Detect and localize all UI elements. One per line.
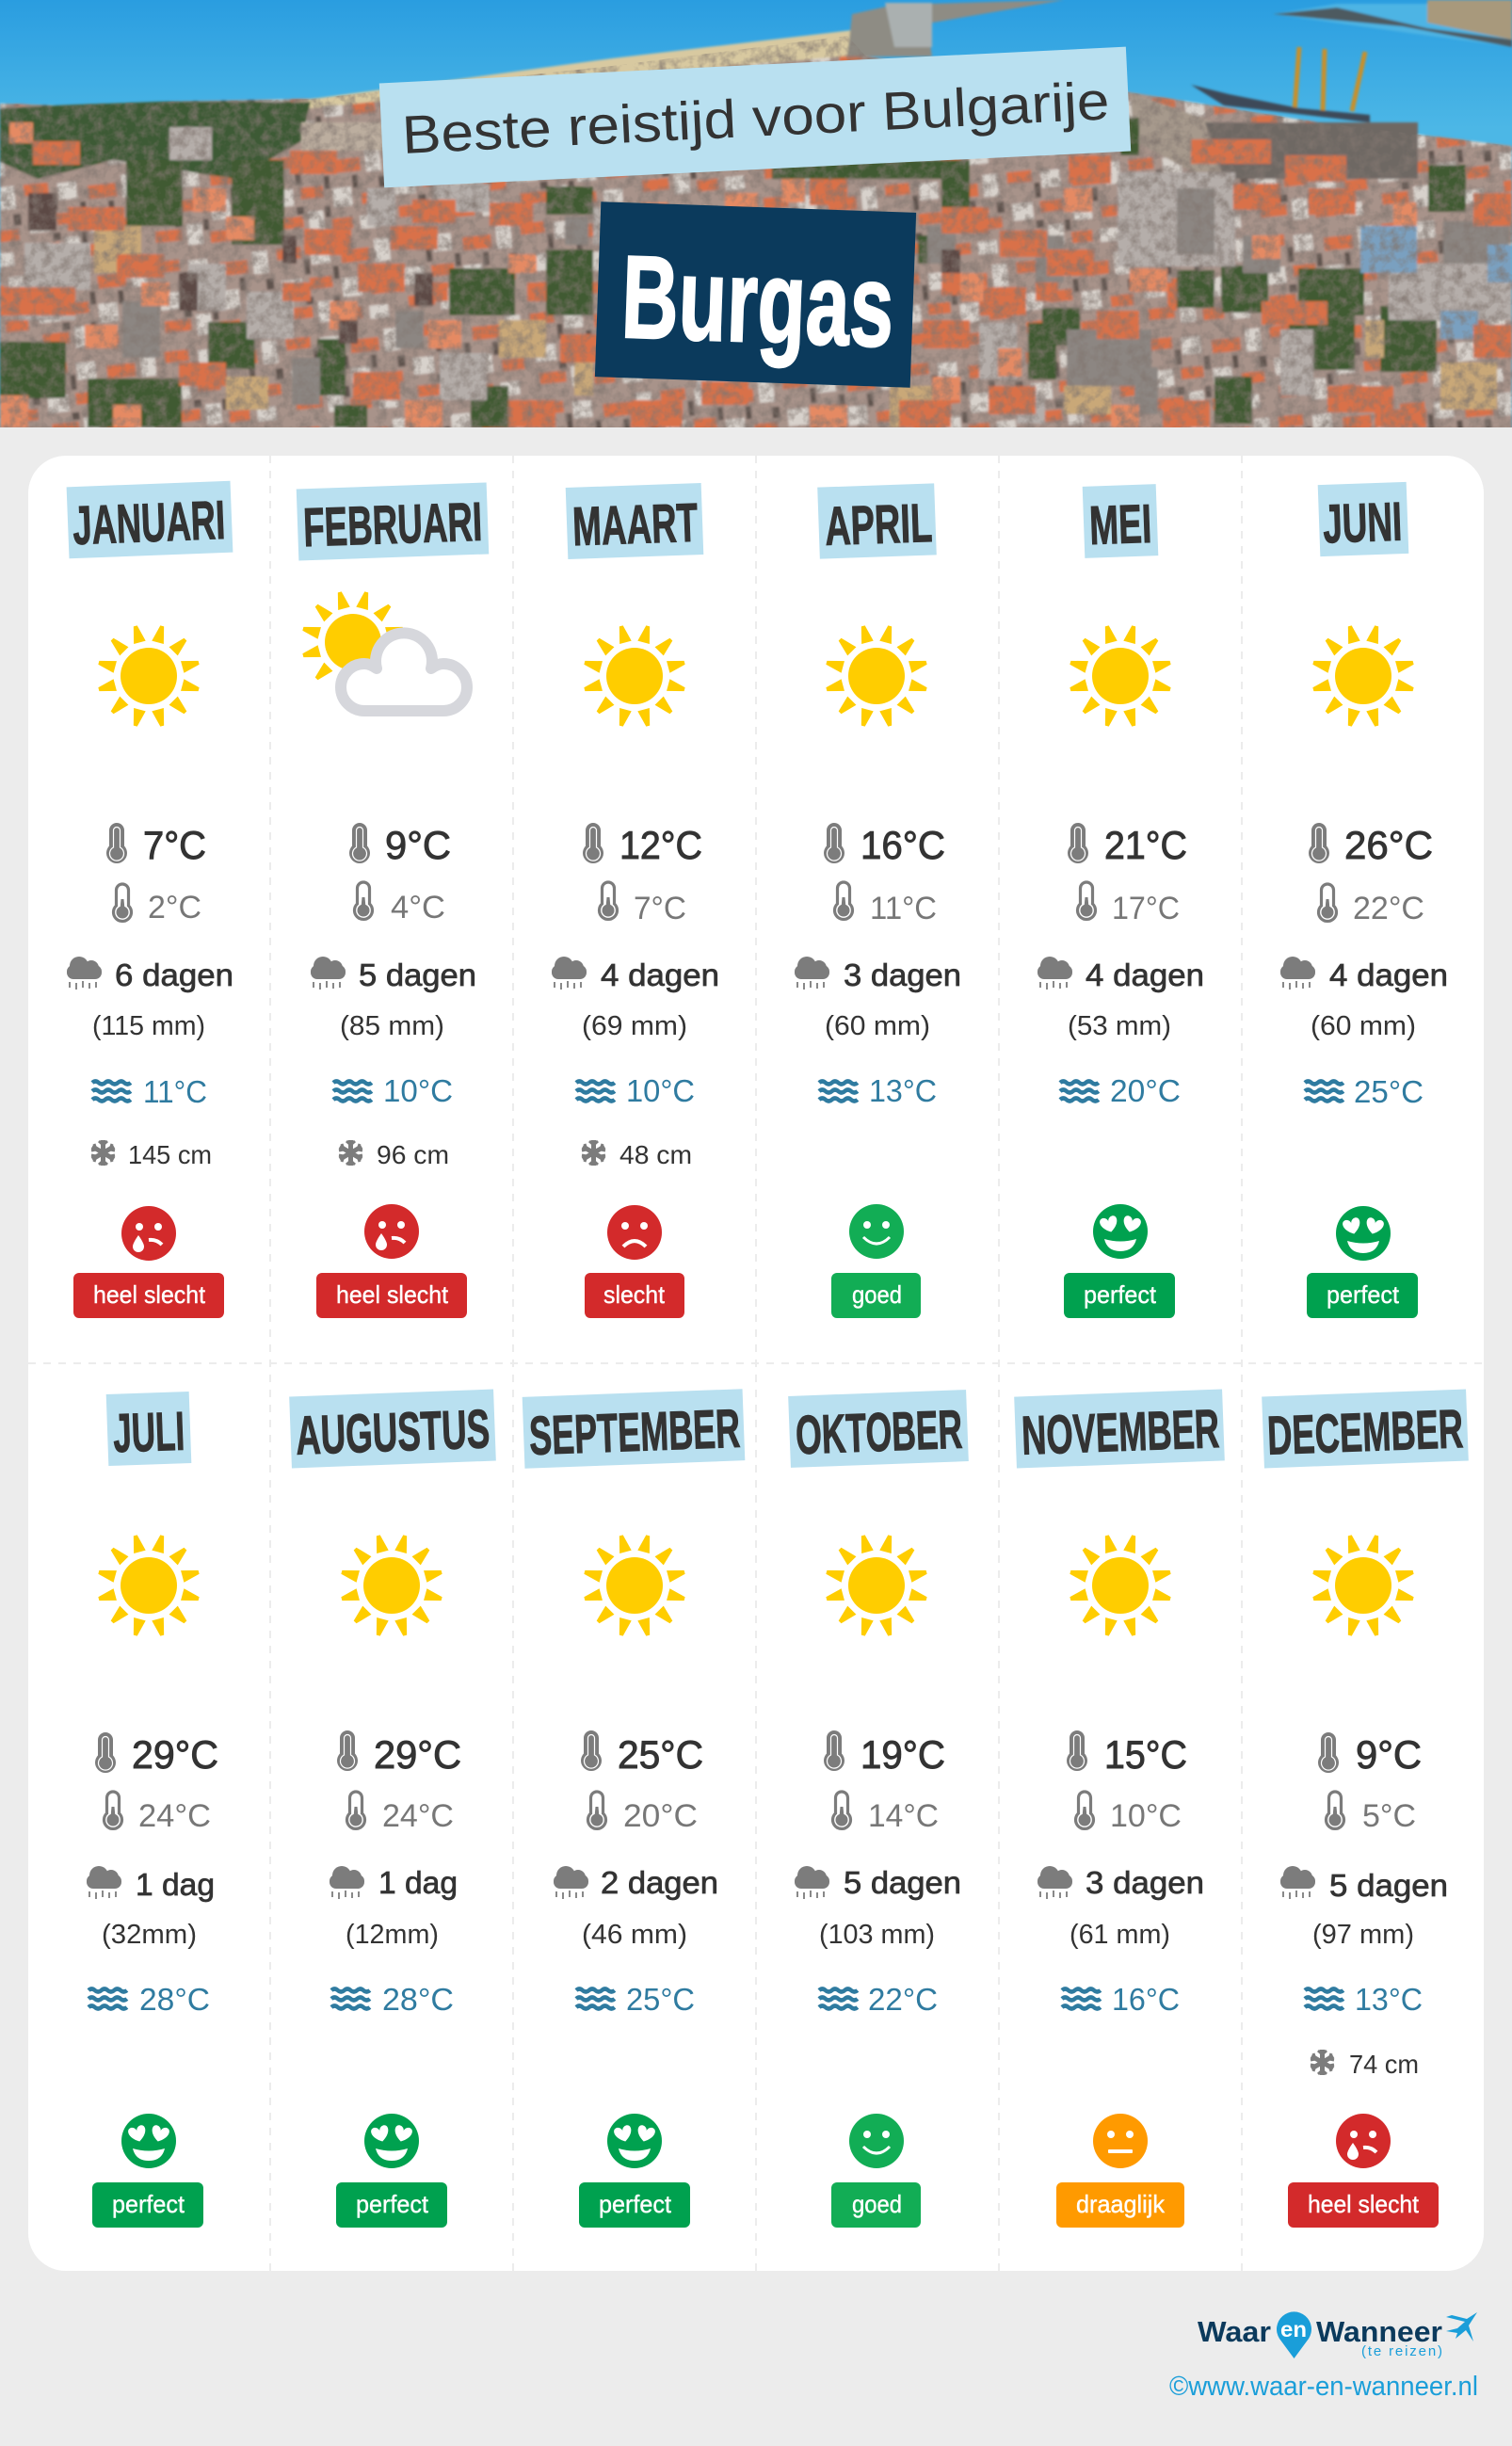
max temperature: 7°C — [143, 823, 206, 867]
rating badge — [831, 1273, 921, 1318]
rating smiley — [1336, 1206, 1391, 1261]
sea temperature: 25°C — [1354, 1074, 1424, 1109]
rain days: 6 dagen — [115, 957, 233, 992]
sea temperature: 25°C — [626, 1982, 695, 2017]
sea temperature: 22°C — [868, 1982, 938, 2017]
min temperature — [599, 882, 686, 926]
sea temperature — [331, 1982, 454, 2017]
rain days — [1037, 1865, 1204, 1900]
min temperature — [104, 1792, 211, 1834]
rating smiley — [1336, 2114, 1391, 2168]
max temperature — [581, 1730, 703, 1777]
month label: JANUARI — [72, 490, 226, 556]
rating badge — [585, 1273, 684, 1318]
panel: januari — [67, 481, 233, 1318]
copyright url: ©www.waar-en-wanneer.nl — [1169, 2372, 1478, 2402]
rating smiley — [1093, 2114, 1148, 2168]
rating badge: goed — [852, 2190, 902, 2218]
sea temperature: 16°C — [1112, 1982, 1180, 2017]
month label — [1014, 1389, 1225, 1469]
rain days — [67, 957, 233, 992]
max temperature — [349, 823, 451, 867]
snowfall: 48 cm — [619, 1140, 692, 1169]
rating badge: heel slecht — [1308, 2190, 1420, 2218]
min temperature: 11°C — [870, 891, 937, 926]
max temperature — [95, 1732, 218, 1777]
snowfall: 145 cm — [128, 1140, 212, 1169]
sea temperature — [88, 1982, 210, 2017]
max temperature — [337, 1730, 461, 1777]
max temperature — [1068, 823, 1187, 867]
rainfall: (61 mm) — [1070, 1920, 1170, 1950]
icon: sun — [1311, 624, 1415, 728]
rain days: 4 dagen — [1086, 957, 1204, 992]
logo: Waar en Wanneer: en — [1280, 2317, 1307, 2341]
min temperature: 2°C — [148, 890, 201, 925]
snowfall: 96 cm — [377, 1140, 449, 1169]
max temperature — [1318, 1732, 1422, 1777]
month label — [1318, 482, 1408, 556]
snowfall: 74 cm — [1349, 2050, 1419, 2079]
rain days — [1280, 957, 1448, 992]
rain days — [311, 957, 476, 992]
rating smiley — [1093, 1204, 1148, 1259]
sea temperature: 10°C — [626, 1073, 695, 1108]
min temperature — [1075, 1792, 1182, 1834]
rain days — [1037, 957, 1204, 992]
month label — [523, 1389, 745, 1469]
max temperature — [824, 823, 945, 867]
month label: JUNI — [1322, 491, 1403, 555]
min temperature: 7°C — [634, 891, 686, 926]
panel: september — [523, 1389, 745, 2228]
logo: Waar en Wanneer: (te reizen) — [1361, 2343, 1442, 2359]
max temperature: 25°C — [618, 1732, 703, 1777]
month label — [1083, 484, 1158, 558]
min temperature: 4°C — [391, 890, 445, 925]
min temperature — [354, 882, 445, 925]
max temperature: 9°C — [1356, 1732, 1422, 1777]
min temperature: 24°C — [138, 1798, 211, 1834]
min temperature: 10°C — [1110, 1798, 1182, 1834]
city name block — [595, 201, 916, 388]
rainfall: (32mm) — [102, 1920, 197, 1950]
panel: maart — [552, 483, 719, 1318]
rating smiley — [849, 1204, 904, 1259]
month label: MEI — [1088, 493, 1152, 556]
grid dividers — [28, 456, 1484, 2271]
sea temperature — [1062, 1982, 1180, 2017]
rainfall: (60 mm) — [825, 1011, 930, 1041]
month label — [297, 482, 489, 561]
sea temperature: 20°C — [1110, 1073, 1181, 1108]
rain days: 1 dag — [136, 1867, 215, 1902]
icon: sun behind cloud — [301, 590, 467, 711]
main white panel — [28, 456, 1484, 2271]
sea temperature — [1305, 1982, 1423, 2017]
rating smiley — [607, 2114, 662, 2168]
rain days: 5 dagen — [844, 1865, 961, 1900]
month label: FEBRUARI — [302, 491, 483, 558]
month label: NOVEMBER — [1021, 1398, 1220, 1467]
rating badge: heel slecht — [336, 1280, 449, 1309]
rating badge — [1288, 2182, 1439, 2228]
rating smiley — [364, 1204, 419, 1259]
rating badge: perfect — [112, 2190, 185, 2218]
month label: JULI — [112, 1401, 185, 1464]
icon: sun — [1311, 1534, 1415, 1637]
rating badge — [73, 1273, 224, 1318]
rain days: 5 dagen — [359, 957, 476, 992]
rating badge — [316, 1273, 467, 1318]
max temperature: 26°C — [1344, 823, 1433, 867]
panel: april — [795, 483, 961, 1318]
rating badge — [92, 2182, 203, 2228]
month label: MAART — [571, 492, 699, 557]
max temperature: 12°C — [619, 823, 702, 867]
panel: november — [1014, 1389, 1225, 2228]
logo: Waar en Wanneer — [1198, 2311, 1477, 2359]
sea temperature — [576, 1073, 695, 1108]
title banner — [379, 47, 1131, 187]
rainfall: (46 mm) — [582, 1920, 687, 1950]
min temperature — [1318, 884, 1424, 926]
icon: airplane — [1446, 2312, 1477, 2341]
max temperature — [824, 1730, 945, 1777]
icon: sun — [340, 1534, 443, 1637]
rainfall: (115 mm) — [92, 1011, 205, 1041]
month label — [817, 483, 937, 559]
rain days: 3 dagen — [844, 957, 961, 992]
month label: APRIL — [824, 492, 933, 557]
rating smiley — [121, 1206, 176, 1261]
rating badge — [831, 2182, 921, 2228]
rating badge: slecht — [603, 1280, 666, 1309]
rain days — [554, 1865, 718, 1900]
logo: Waar en Wanneer: Waar — [1198, 2315, 1271, 2348]
rainfall: (69 mm) — [582, 1011, 687, 1041]
snowfall — [91, 1140, 212, 1169]
rainfall: (53 mm) — [1068, 1011, 1171, 1041]
sea temperature: 13°C — [869, 1073, 937, 1108]
max temperature: 19°C — [861, 1732, 945, 1777]
icon: sun — [583, 1534, 686, 1637]
icon: sun — [97, 624, 201, 728]
snowfall — [339, 1140, 449, 1169]
rating badge — [336, 2182, 447, 2228]
icon: sun — [1069, 624, 1172, 728]
month label — [289, 1390, 496, 1468]
rating badge: perfect — [599, 2190, 672, 2218]
icon: sun — [1069, 1534, 1172, 1637]
sea temperature — [1060, 1073, 1181, 1108]
max temperature: 29°C — [132, 1732, 218, 1777]
rain days: 5 dagen — [1329, 1868, 1448, 1903]
icon: location pin — [1277, 2311, 1311, 2358]
sea temperature: 28°C — [139, 1982, 210, 2017]
rain days: 4 dagen — [601, 957, 719, 992]
rating badge: goed — [852, 1280, 902, 1309]
min temperature: 24°C — [382, 1798, 454, 1834]
rain days — [1280, 1866, 1448, 1903]
panel: december — [1262, 1390, 1469, 2228]
max temperature — [1067, 1730, 1187, 1777]
hero photo: aerial view of Burgas — [0, 0, 1512, 427]
rating badge: perfect — [1327, 1280, 1400, 1309]
min temperature: 14°C — [868, 1798, 939, 1834]
month label: SEPTEMBER — [528, 1398, 741, 1467]
min temperature — [1077, 882, 1180, 926]
max temperature: 21°C — [1104, 823, 1187, 867]
sea temperature: 13°C — [1355, 1982, 1423, 2017]
snowfall — [582, 1140, 692, 1169]
max temperature: 29°C — [374, 1732, 461, 1777]
month label: AUGUSTUS — [295, 1398, 491, 1467]
rain days: 2 dagen — [601, 1865, 718, 1900]
rain days: 1 dag — [378, 1865, 458, 1900]
panel: juli — [87, 1392, 218, 2228]
rating smiley — [607, 1205, 662, 1260]
rating smiley — [849, 2114, 904, 2168]
rainfall: (97 mm) — [1312, 1920, 1414, 1950]
rating smiley — [364, 2114, 419, 2168]
min temperature — [834, 882, 937, 926]
rating badge — [1064, 1273, 1175, 1318]
month label — [67, 481, 233, 558]
rain days: 4 dagen — [1329, 957, 1448, 992]
rain days — [87, 1866, 215, 1902]
panel: februari — [297, 482, 489, 1318]
max temperature — [583, 823, 702, 867]
rainfall: (60 mm) — [1311, 1011, 1416, 1041]
month label — [566, 483, 703, 559]
max temperature — [106, 823, 206, 867]
rating badge — [1307, 1273, 1418, 1318]
panel: oktober — [788, 1390, 969, 2228]
min temperature: 5°C — [1362, 1798, 1416, 1834]
sea temperature — [576, 1982, 695, 2017]
rating badge: heel slecht — [93, 1280, 206, 1309]
city name block: Burgas — [619, 232, 896, 372]
snowfall — [1311, 2050, 1419, 2079]
sea temperature — [92, 1074, 207, 1109]
min temperature — [1326, 1792, 1416, 1834]
sea temperature — [1305, 1074, 1424, 1109]
sea temperature — [819, 1073, 937, 1108]
panel: augustus — [289, 1390, 496, 2228]
sea temperature: 10°C — [383, 1073, 453, 1108]
min temperature — [346, 1792, 454, 1834]
min temperature — [113, 884, 201, 925]
month label — [106, 1392, 191, 1466]
min temperature: 20°C — [623, 1798, 698, 1834]
rain days — [795, 957, 961, 992]
min temperature: 17°C — [1112, 891, 1180, 926]
rating badge: perfect — [356, 2190, 429, 2218]
panel: juni — [1280, 482, 1448, 1318]
max temperature: 16°C — [861, 823, 945, 867]
rating badge: perfect — [1084, 1280, 1157, 1309]
rating smiley — [121, 2114, 176, 2168]
rating badge — [579, 2182, 690, 2228]
rain days: 3 dagen — [1086, 1865, 1204, 1900]
rating badge: draaglijk — [1076, 2190, 1166, 2218]
month label: OKTOBER — [795, 1399, 963, 1466]
icon: sun — [97, 1534, 201, 1637]
sea temperature — [819, 1982, 938, 2017]
rainfall: (12mm) — [346, 1920, 439, 1950]
logo: Waar en Wanneer: Wanneer — [1316, 2315, 1442, 2348]
sea temperature: 28°C — [382, 1982, 454, 2017]
rain days — [552, 957, 719, 992]
rating badge — [1056, 2182, 1184, 2228]
max temperature: 15°C — [1104, 1732, 1187, 1777]
rain days — [330, 1865, 458, 1900]
min temperature — [832, 1792, 939, 1834]
sea temperature — [333, 1073, 453, 1108]
rainfall: (103 mm) — [819, 1920, 935, 1950]
title banner: Beste reistijd voor Bulgarije — [401, 71, 1111, 166]
min temperature: 22°C — [1353, 891, 1424, 926]
rainfall: (85 mm) — [340, 1011, 444, 1041]
sea temperature: 11°C — [143, 1074, 207, 1109]
panel: mei — [1037, 484, 1204, 1318]
icon: sun — [583, 624, 686, 728]
icon: sun — [825, 624, 928, 728]
rain days — [795, 1865, 961, 1900]
min temperature — [587, 1792, 698, 1834]
month label — [788, 1390, 969, 1468]
icon: sun — [825, 1534, 928, 1637]
max temperature: 9°C — [385, 823, 451, 867]
